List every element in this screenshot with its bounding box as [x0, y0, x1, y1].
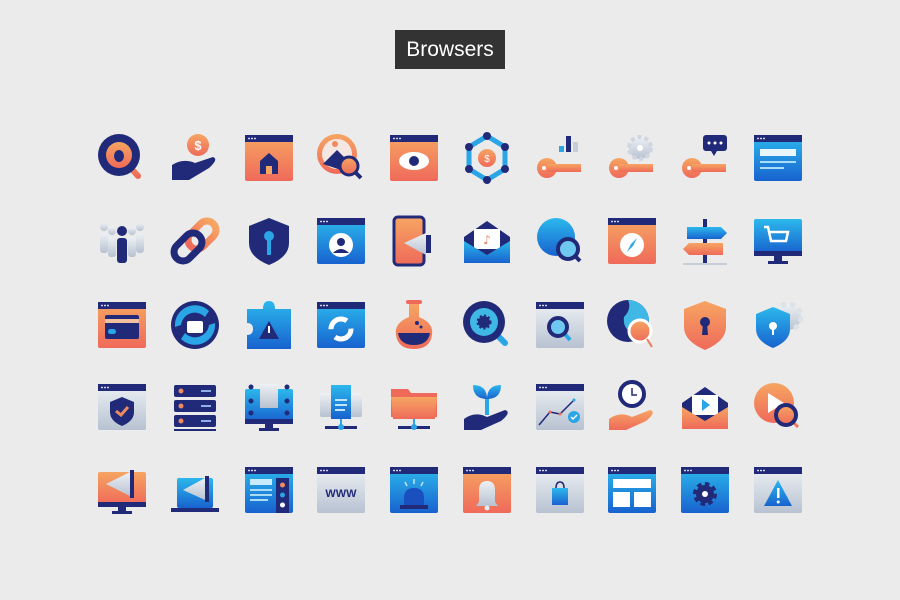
icon: hand with coin: $	[194, 138, 202, 153]
icon: shopping bag window	[536, 467, 584, 513]
icon: chain link	[170, 217, 220, 265]
icon: flask	[396, 300, 432, 349]
icon: bug search	[98, 134, 140, 176]
icon: shield gear	[756, 304, 801, 348]
icon: gear window	[681, 467, 729, 513]
icon: key with gear	[609, 137, 653, 178]
icon: gear search	[463, 301, 505, 343]
icon: shared folder	[391, 389, 437, 430]
icon: warning window	[754, 467, 802, 513]
icon: phone megaphone	[394, 217, 431, 265]
icon: music mail	[464, 221, 510, 263]
icon: image search	[317, 134, 361, 178]
icon: bell window	[463, 467, 511, 513]
icon: shield check window	[98, 384, 146, 430]
icon: content window	[245, 467, 293, 513]
icon: music mail: ♪	[483, 233, 491, 247]
icon: like refresh	[171, 301, 219, 349]
icon: network monitor	[245, 384, 293, 431]
icon: server stack	[174, 385, 216, 431]
icon: people leader	[100, 223, 144, 263]
icon: growth chart window	[536, 384, 584, 430]
icon: card window	[98, 302, 146, 348]
icon: form window	[754, 135, 802, 181]
icon: shield lock	[684, 301, 726, 350]
icon: user window	[317, 218, 365, 264]
icon: network: $	[484, 154, 490, 165]
icon: shared document	[320, 385, 362, 430]
icon: key with chart	[537, 136, 581, 178]
icon: home window	[245, 135, 293, 181]
icon: compass window	[608, 218, 656, 264]
icon: music search	[537, 218, 580, 261]
icon: plant hand	[464, 385, 508, 430]
icon: www window	[317, 467, 365, 513]
icon: video search	[754, 383, 798, 427]
icon: www window: WWW	[325, 488, 357, 500]
icon: globe search	[607, 300, 652, 347]
icon: megaphone laptop	[171, 476, 219, 512]
icon: key with chat	[682, 135, 727, 178]
icon: search window	[536, 302, 584, 348]
icon: video mail	[682, 387, 728, 429]
icon: time hand	[609, 382, 653, 430]
title: Browsers	[406, 38, 494, 61]
icon: layout window	[608, 467, 656, 513]
icon: shield key	[249, 218, 289, 265]
title	[395, 30, 505, 69]
icon: hand with coin	[172, 134, 215, 180]
icon: megaphone monitor	[98, 470, 146, 514]
icon: refresh window	[317, 302, 365, 348]
icon: alarm window	[390, 467, 438, 513]
icon: signpost	[683, 219, 727, 265]
icon: puzzle warning	[247, 301, 291, 349]
icon: shopping monitor	[754, 219, 802, 264]
icon: network	[465, 132, 509, 184]
icon: eye window	[390, 135, 438, 181]
